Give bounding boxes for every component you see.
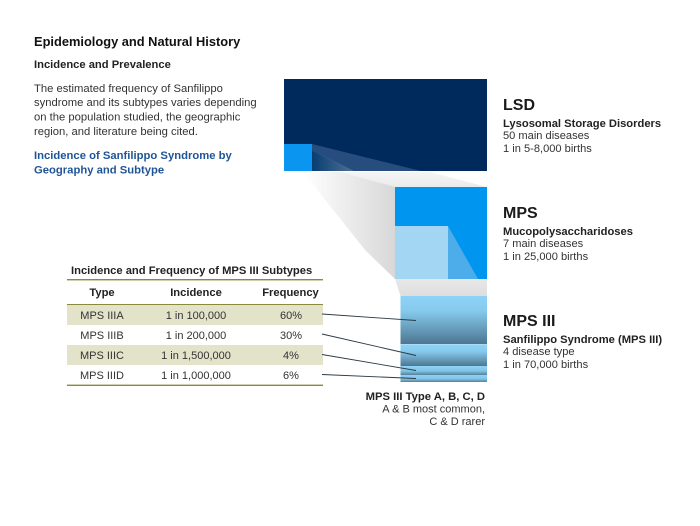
table title: Incidence and Frequency of MPS III Subtypes	[71, 265, 312, 277]
leader lines	[322, 314, 416, 378]
table: MPS IIID	[80, 370, 124, 382]
intro paragraph: The estimated frequency of Sanfilippo	[34, 83, 223, 95]
label: LSD: 1 in 5-8,000 births	[503, 143, 592, 155]
intro paragraph	[34, 83, 257, 138]
table: 1 in 1,500,000	[161, 350, 231, 362]
label: LSD: Lysosomal Storage Disorders	[503, 118, 661, 130]
label: LSD: 50 main diseases	[503, 130, 590, 142]
label: MPS III: Sanfilippo Syndrome (MPS III)	[503, 334, 662, 346]
block: MPS	[395, 187, 487, 279]
label: MPS: 7 main diseases	[503, 238, 584, 250]
MPS III types caption: A & B most common,	[382, 404, 485, 416]
label: LSD	[503, 97, 661, 155]
projection: MPS to MPS III	[395, 279, 487, 296]
blue subheading	[34, 150, 233, 176]
table: MPS IIIA	[80, 310, 124, 322]
subheading: Incidence and Prevalence	[34, 59, 171, 71]
MPS III types caption: C & D rarer	[429, 416, 485, 428]
label: MPS III	[503, 313, 662, 371]
intro paragraph: syndrome and its subtypes varies depending	[34, 97, 257, 109]
blue subheading: Incidence of Sanfilippo Syndrome by	[34, 150, 233, 162]
table: Frequency	[262, 287, 320, 299]
table: MPS IIIB	[80, 330, 124, 342]
table: 30%	[280, 330, 302, 342]
table: 1 in 1,000,000	[161, 370, 231, 382]
table: Type	[89, 287, 115, 299]
MPS III types caption: MPS III Type A, B, C, D	[366, 391, 485, 403]
table: 6%	[283, 370, 299, 382]
projection: LSD to MPS	[303, 172, 487, 279]
table	[67, 279, 323, 386]
block: MPS III bands	[400, 296, 487, 382]
table: 1 in 100,000	[166, 310, 226, 322]
table: 60%	[280, 310, 302, 322]
MPS III types caption	[366, 391, 485, 428]
table: Incidence	[170, 287, 222, 299]
table: 1 in 200,000	[166, 330, 226, 342]
label: MPS: Mucopolysaccharidoses	[503, 226, 633, 238]
label: MPS III: MPS III	[503, 313, 555, 330]
block: LSD	[284, 79, 487, 171]
table: 4%	[283, 350, 299, 362]
label: MPS	[503, 205, 633, 263]
label: MPS: MPS	[503, 205, 538, 222]
label: MPS: 1 in 25,000 births	[503, 251, 589, 263]
label: MPS III: 4 disease type	[503, 346, 575, 358]
intro paragraph: region, and literature being cited.	[34, 126, 198, 138]
blue subheading: Geography and Subtype	[34, 164, 164, 176]
table: MPS IIIC	[80, 350, 124, 362]
intro paragraph: on the population studied, the geographic	[34, 112, 241, 124]
title: Epidemiology and Natural History	[34, 34, 241, 49]
label: LSD: LSD	[503, 97, 535, 114]
label: MPS III: 1 in 70,000 births	[503, 359, 589, 371]
